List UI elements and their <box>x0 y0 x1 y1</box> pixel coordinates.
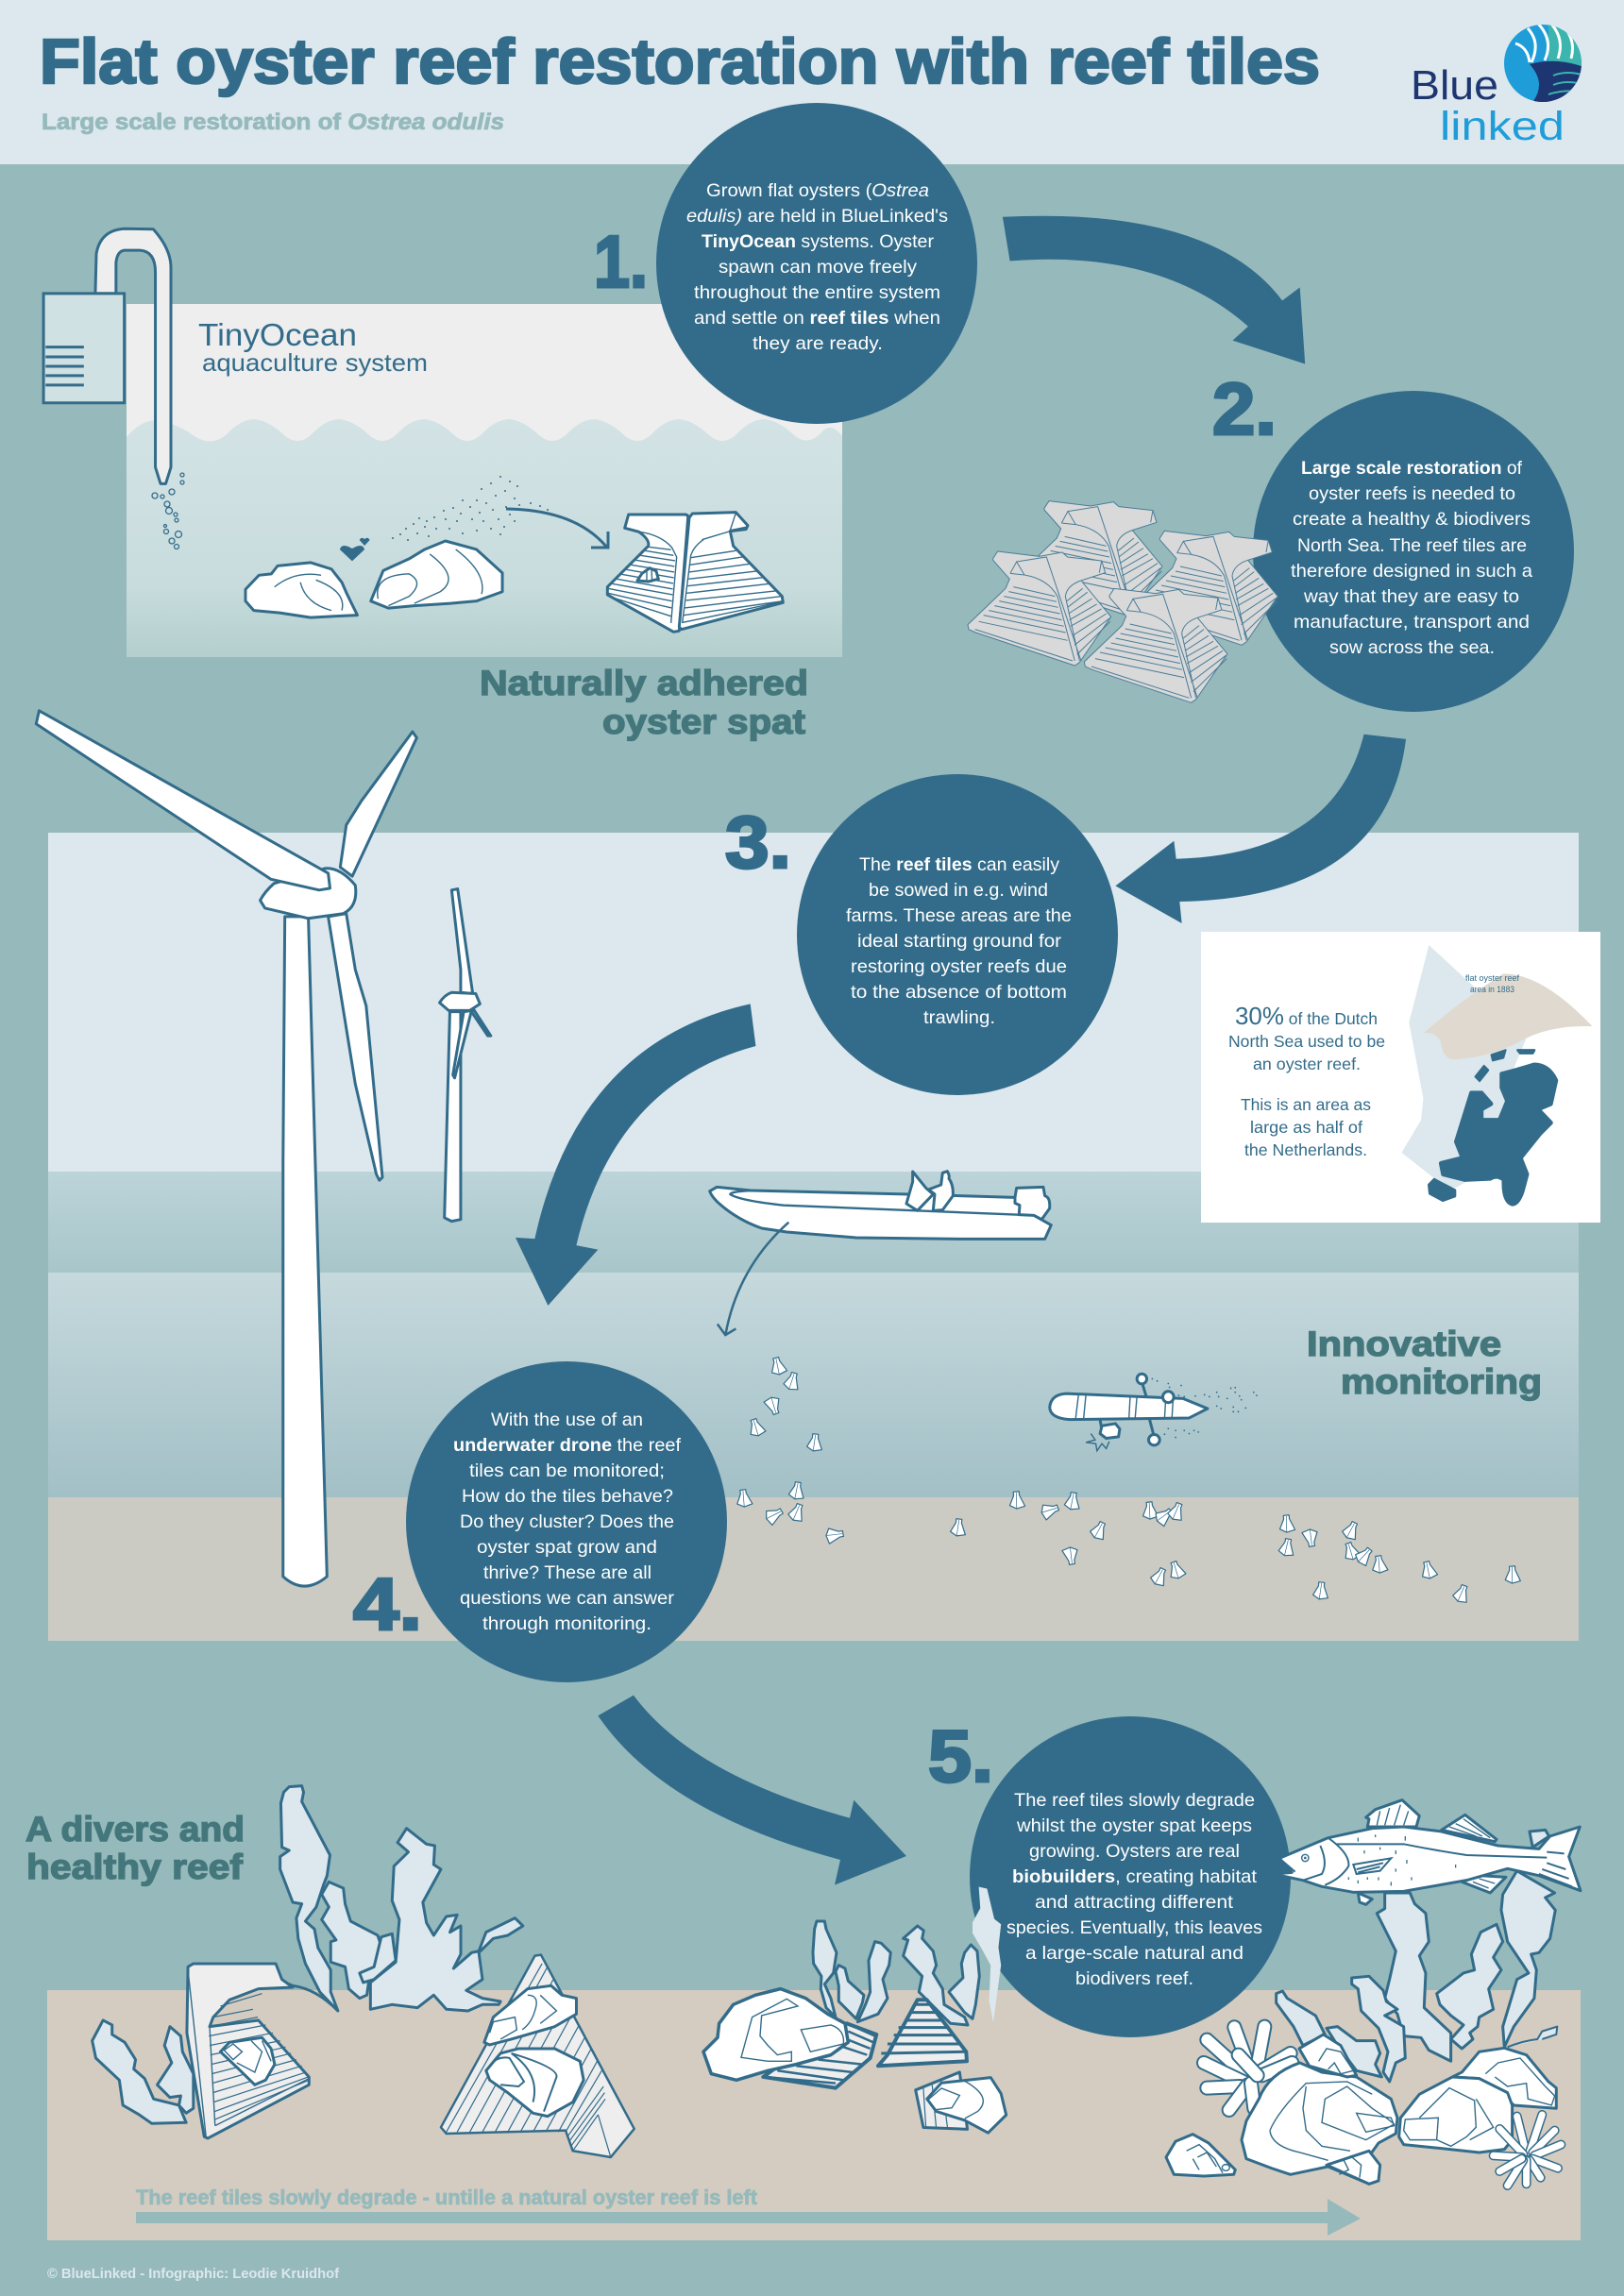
icon: outlet pipe and dosing box <box>43 228 171 483</box>
number 4: 4. <box>353 1562 422 1646</box>
coral left <box>1204 2027 1292 2110</box>
icon: stack of reef tiles <box>968 501 1277 702</box>
circle text 2: manufacture, transport and <box>1294 612 1530 633</box>
coral right <box>1494 2115 1561 2186</box>
bubbles <box>152 473 184 549</box>
panel: 30% oyster reef map <box>1201 932 1600 1223</box>
circle text 1: they are ready. <box>753 333 883 354</box>
circle text 4: thrive? These are all <box>483 1562 651 1583</box>
circle text 5: biobuilders, creating habitat <box>1012 1866 1258 1887</box>
logo: BlueLinked <box>1414 25 1582 140</box>
circle text 5 <box>970 1716 1291 2037</box>
callout text <box>1228 1002 1385 1159</box>
map annotation: area in 1883 <box>1470 985 1514 994</box>
map annotation <box>1465 973 1519 994</box>
step 1 <box>594 103 977 424</box>
circle text 4: underwater drone the reef <box>453 1435 682 1456</box>
circle text 1: Grown flat oysters ( Ostrea <box>706 180 929 201</box>
large oyster <box>1242 2034 1397 2184</box>
tile under oyster <box>763 2023 876 2088</box>
oysters with heart <box>245 538 502 617</box>
callout text: large as half of <box>1250 1118 1362 1137</box>
circle text 2: North Sea. The reef tiles are <box>1297 535 1527 556</box>
circle text 4: How do the tiles behave? <box>462 1486 673 1507</box>
oyster spat particles <box>393 477 548 540</box>
circle text 1: TinyOcean systems. Oyster <box>702 231 935 252</box>
seaweed right <box>1277 1830 1557 2082</box>
panel: TinyOcean aquaculture tank <box>43 228 842 657</box>
circle text 3: trawling. <box>923 1007 995 1028</box>
circle text 3: be sowed in e.g. wind <box>869 880 1048 901</box>
circle text 3 <box>797 774 1118 1095</box>
circle text 2: create a healthy & biodivers <box>1293 509 1531 530</box>
heading: a divers and healthy reef: healthy reef <box>26 1848 244 1886</box>
map annotation: flat oyster reef <box>1465 973 1519 983</box>
subtitle: Large scale restoration of Ostrea odulis <box>42 110 504 135</box>
tank label: aquaculture system <box>202 348 428 377</box>
circle text 2 <box>1253 391 1574 712</box>
old reef tile with oyster <box>187 1964 309 2138</box>
icon: outboard motor <box>1015 1187 1050 1220</box>
arrow: step 3 to 4 <box>516 1004 755 1306</box>
circle text 4: through monitoring. <box>482 1613 651 1634</box>
circle text 4: Do they cluster? Does the <box>460 1511 674 1532</box>
heading: innovative monitoring: Innovative <box>1307 1325 1501 1363</box>
circle text 5: and attracting different <box>1035 1892 1234 1913</box>
step 2 <box>968 367 1574 712</box>
panel: reef seabed <box>47 1990 1581 2240</box>
circle text 5: species. Eventually, this leaves <box>1007 1917 1262 1938</box>
arrow: tiles sown from boat <box>718 1223 788 1335</box>
title: Flat oyster reef restoration with reef tiles <box>40 26 1320 97</box>
small reef tiles scattered on the sea floor <box>736 1356 1520 1604</box>
heading: a divers and healthy reef <box>25 1810 245 1886</box>
arrow: step 1 to 2 <box>1003 216 1305 363</box>
tank label: TinyOcean <box>198 317 357 352</box>
circle text 4: oyster spat grow and <box>477 1537 657 1558</box>
right oyster pair <box>1399 2048 1556 2152</box>
wind turbine: large <box>36 711 416 1586</box>
circle text 5: a large-scale natural and <box>1025 1943 1243 1964</box>
arrow: step 4 to 5 <box>598 1696 906 1885</box>
logo: BlueLinked: Blue <box>1411 62 1498 109</box>
circle text 3: ideal starting ground for <box>857 931 1062 952</box>
caption and arrow: reef tiles degrade over time <box>136 2186 1361 2236</box>
circle text 4: questions we can answer <box>460 1588 675 1609</box>
boat with arrow <box>710 1172 1051 1239</box>
circle text 5: growing. Oysters are real <box>1029 1841 1240 1862</box>
reef scene middle: seaweed, oyster on tile and stepped tile <box>703 1921 979 2088</box>
heading: naturally adhered oyster spat: oyster spat <box>602 702 805 741</box>
callout text: North Sea used to be <box>1228 1032 1385 1051</box>
number 1: 1. <box>594 220 648 303</box>
circle text 2: therefore designed in such a <box>1291 561 1532 582</box>
caption and arrow: reef tiles degrade over time: The reef tiles slowly degrade - untille a natural oyster reef is left <box>136 2186 758 2209</box>
step 3 <box>725 774 1118 1095</box>
number 2: 2. <box>1212 367 1277 450</box>
circle text 3: The reef tiles can easily <box>859 854 1059 875</box>
step 4 <box>353 1361 727 1682</box>
heading: a divers and healthy reef: A divers and <box>25 1810 245 1849</box>
circle text 4 <box>406 1361 727 1682</box>
icon: underwater drone <box>1050 1374 1257 1451</box>
triangular reef tile with oysters <box>441 1955 634 2157</box>
circle text 2: Large scale restoration of <box>1301 458 1523 479</box>
panel: wind farm sea scene <box>48 833 1579 1641</box>
small oyster on degraded tile <box>916 2072 1007 2133</box>
circle text 1 <box>656 103 977 424</box>
reef scene right: oysters, coral, seaweed and fish <box>1166 1800 1581 2186</box>
arrow: spat to tile <box>506 509 608 548</box>
step 5 circle and number <box>928 1714 1291 2037</box>
seaweed middle <box>813 1921 979 2025</box>
circle text 5: whilst the oyster spat keeps <box>1016 1815 1252 1836</box>
reef scene left: seaweed and old tiles <box>93 1786 634 2157</box>
small oyster <box>1166 2135 1235 2176</box>
circle text 1: edulis) are held in BlueLinked's <box>686 206 948 227</box>
large oyster on tile <box>703 1989 848 2080</box>
icon: fish <box>1273 1800 1581 1904</box>
circle text 2: sow across the sea. <box>1329 637 1495 658</box>
circle text 1: spawn can move freely <box>719 257 917 278</box>
seaweed over circle <box>973 1887 1001 2022</box>
circle text 5: The reef tiles slowly degrade <box>1014 1790 1255 1811</box>
footer credit: © BlueLinked - Infographic: Leodie Kruidhof <box>47 2267 339 2282</box>
heading: naturally adhered oyster spat: Naturally adhered <box>480 664 808 702</box>
callout text: This is an area as <box>1241 1095 1371 1114</box>
icon: reef tile with spat <box>607 513 783 632</box>
heading: innovative monitoring: monitoring <box>1341 1362 1542 1401</box>
heading: naturally adhered oyster spat <box>480 664 808 741</box>
wind turbine: distant <box>440 889 491 1222</box>
header band <box>0 0 1624 164</box>
reef scene right: seaweed over circle and degraded oyster tile <box>916 1887 1007 2133</box>
circle text 3: restoring oyster reefs due <box>851 956 1067 977</box>
callout text: 30% of the Dutch <box>1235 1002 1378 1030</box>
seaweed group <box>93 1786 523 2123</box>
circle text 1: and settle on reef tiles when <box>694 308 940 329</box>
heading: innovative monitoring <box>1307 1325 1542 1401</box>
stepped tile <box>878 2000 967 2066</box>
callout text: an oyster reef. <box>1253 1055 1361 1073</box>
tank label <box>198 317 428 377</box>
circle text 3: to the absence of bottom <box>851 982 1067 1003</box>
circle text 4: tiles can be monitored; <box>469 1460 665 1481</box>
number 5: 5. <box>928 1714 993 1798</box>
icon: boat hull <box>710 1187 1051 1239</box>
circle text 5: biodivers reef. <box>1075 1968 1193 1989</box>
circle text 2: oyster reefs is needed to <box>1309 483 1515 504</box>
number 3: 3. <box>725 801 791 884</box>
callout text: the Netherlands. <box>1244 1140 1367 1159</box>
circle text 4: With the use of an <box>491 1410 643 1430</box>
map of the Dutch North Sea <box>1401 945 1593 1204</box>
circle text 1: throughout the entire system <box>694 282 940 303</box>
logo: BlueLinked: linked <box>1440 104 1565 149</box>
circle text 3: farms. These areas are the <box>846 905 1072 926</box>
arrow: step 2 to 3 <box>1115 734 1406 923</box>
icon: boat console and skipper <box>906 1172 953 1210</box>
circle text 2: way that they are easy to <box>1303 586 1519 607</box>
